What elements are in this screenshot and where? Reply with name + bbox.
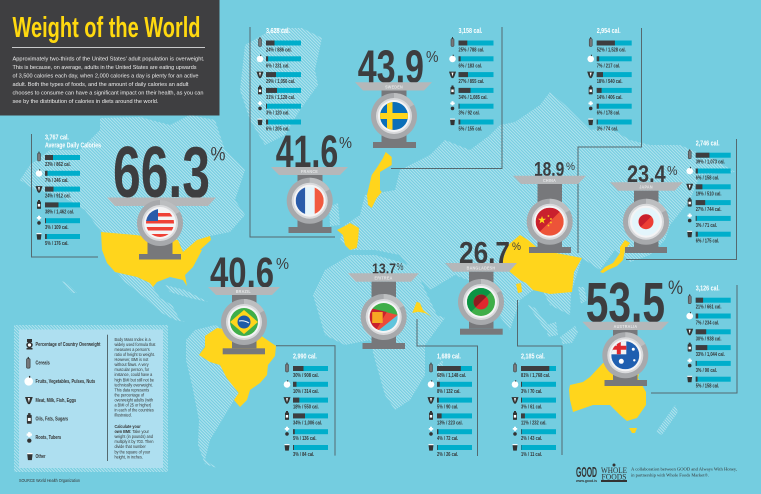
scale: australia: AUSTRALIA xyxy=(614,324,637,329)
panel: sweden calories: 5% / 155 cal. xyxy=(458,126,482,132)
bmi explanation: a BMI of 25 or higher) xyxy=(114,402,152,408)
scale: australia xyxy=(582,271,683,386)
percentage: 41.6 xyxy=(276,126,338,177)
legend: roots: Roots, Tubers xyxy=(36,435,61,441)
flag: china xyxy=(536,208,564,236)
bmi explanation: However, BMI is not xyxy=(114,357,149,362)
total: 2,990 cal. xyxy=(293,353,317,361)
legend: other xyxy=(27,453,46,460)
scale: sweden: % xyxy=(426,49,438,66)
panel: japan calories: 6% / 158 cal. xyxy=(696,175,719,181)
panel: usa calories: 24% / 912 cal. xyxy=(45,193,71,199)
panel: bangladesh calories: 1% / 11 cal. xyxy=(521,452,542,457)
total: 3,126 cal. xyxy=(696,285,720,293)
scale: bangladesh: BANGLADESH xyxy=(467,265,495,271)
panel: eritrea calories: 13% / 223 cal. xyxy=(437,420,463,426)
total: 2,185 cal. xyxy=(521,353,545,361)
panel: eritrea calories xyxy=(428,353,472,457)
scale: usa xyxy=(107,146,225,260)
panel: japan calories: 3% / 71 cal. xyxy=(696,222,717,228)
logo: whole foods xyxy=(601,464,627,482)
title: Weight of the World xyxy=(12,12,200,44)
total: 3,767 cal. xyxy=(45,134,69,142)
panel: china calories: 7% / 217 cal. xyxy=(597,63,620,68)
panel: brazil calories: 30% / 908 cal. xyxy=(293,373,319,378)
logo: good: www.good.is xyxy=(575,479,597,483)
legend: percentage overweight xyxy=(26,339,101,350)
scale: eritrea: % xyxy=(396,262,404,273)
map: sweden xyxy=(367,152,392,208)
intro paragraph: Approximately two-thirds of the United States' adult population is overweight. xyxy=(12,56,205,62)
legend: roots xyxy=(27,432,61,443)
bmi explanation: instance, could have a xyxy=(114,372,153,377)
panel: eritrea calories: 8% / 132 cal. xyxy=(437,388,461,394)
bmi explanation: muscular person, for xyxy=(114,367,150,372)
map: brazil xyxy=(199,328,276,407)
total: 3,158 cal. xyxy=(458,27,483,35)
panel: china calories: 3% / 74 cal. xyxy=(597,126,618,132)
bmi explanation: measures a person's xyxy=(114,347,150,352)
panel: usa calories: 38% / 1,462 cal. xyxy=(45,209,74,215)
scale: brazil xyxy=(208,249,289,354)
intro paragraph: see by the distribution of calories in diets around the world. xyxy=(12,99,159,105)
panel: bangladesh calories: 3% / 70 cal. xyxy=(521,388,542,394)
scale: usa: % xyxy=(210,144,226,166)
percentage: 40.6 xyxy=(210,249,274,297)
panel: usa calories: 3% / 109 cal. xyxy=(45,225,69,230)
scale: china: CHINA xyxy=(543,178,556,183)
panel: bangladesh calories: 3% / 61 cal. xyxy=(521,404,542,410)
intro paragraph: chooses to consume can have a significant impact on their health, as you can xyxy=(12,90,204,96)
bmi explanation: the percentage of xyxy=(114,392,145,397)
total: 1,689 cal. xyxy=(437,353,461,361)
bmi explanation: without flaws. A very xyxy=(114,362,149,367)
panel: usa calories xyxy=(36,134,101,246)
legend: oils: Oils, Fats, Sugars xyxy=(36,417,68,423)
scale: sweden: SWEDEN xyxy=(385,84,403,90)
panel: japan calories xyxy=(686,140,731,244)
collaboration note: in partnership with Whole Foods Market®. xyxy=(631,472,709,478)
scale: australia: % xyxy=(668,278,683,299)
intro paragraph: This is because, on average, adults in the United States are eating upwards xyxy=(12,65,197,71)
legend: fruits: Fruits, Vegetables, Pulses, Nuts xyxy=(36,379,95,385)
panel: sweden calories: 6% / 183 cal. xyxy=(458,63,482,68)
panel: brazil calories: 18% / 550 cal. xyxy=(293,404,319,410)
scale: japan: % xyxy=(667,163,678,178)
flag: france xyxy=(296,187,324,215)
bmi explanation: illustrated. xyxy=(114,412,132,418)
scale: bangladesh: % xyxy=(512,241,521,253)
legend: percentage overweight: Percentage of Country Overweight xyxy=(36,342,101,348)
panel: france calories xyxy=(256,27,301,132)
yellow countries xyxy=(101,152,646,433)
panel: japan calories: 19% / 510 cal. xyxy=(696,191,721,196)
legend: oils xyxy=(27,413,68,424)
panel: france calories: 29% / 1,056 cal. xyxy=(266,79,295,84)
panel: eritrea calories: 4% / 72 cal. xyxy=(437,436,458,441)
bmi explanation: height, in inches. xyxy=(114,454,143,460)
map: bangladesh xyxy=(516,283,522,293)
panel: australia calories xyxy=(686,285,731,389)
scale: eritrea xyxy=(348,260,419,349)
bmi explanation: technically overweight. xyxy=(114,382,153,387)
intro paragraph: adult. Both the types of foods, and the amount of daily calories an adult xyxy=(12,82,189,88)
bmi explanation: Calculate your xyxy=(114,424,141,429)
panel: japan calories: 39% / 1,073 cal. xyxy=(696,159,725,165)
legend panel xyxy=(14,325,168,472)
flag: australia xyxy=(611,341,639,369)
total: 2,954 cal. xyxy=(597,27,621,35)
panel: bangladesh calories: 11% / 232 cal. xyxy=(521,420,547,426)
scale: usa: USA xyxy=(156,200,164,205)
scale: japan: JAPAN xyxy=(639,184,653,190)
panel: eritrea calories: 5% / 90 cal. xyxy=(437,404,458,410)
map: australia xyxy=(569,363,646,421)
bmi explanation: high BMI but still not be xyxy=(114,377,155,382)
collaboration note: A collaboration between GOOD and Always With Honey, xyxy=(631,466,737,472)
logo: good xyxy=(575,464,597,483)
percentage: 18.9 xyxy=(534,159,564,181)
panel: china calories xyxy=(587,27,632,132)
scale: france: % xyxy=(339,135,352,152)
panel: china calories: 52% / 1,528 cal. xyxy=(597,47,626,53)
flag: bangladesh xyxy=(467,288,495,316)
map: japan xyxy=(600,240,630,273)
bmi explanation xyxy=(114,337,156,460)
flag: usa xyxy=(146,209,174,238)
panel: sweden calories: 25% / 788 cal. xyxy=(458,47,484,53)
percentage: 53.5 xyxy=(586,271,665,335)
flag: sweden xyxy=(380,102,408,130)
panel: usa calories: 7% / 246 cal. xyxy=(45,177,69,183)
panel: australia calories: 7% / 234 cal. xyxy=(696,320,719,326)
total: 3,628 cal. xyxy=(266,27,290,35)
bmi explanation: divide that number xyxy=(114,444,146,449)
panel: brazil calories: 34% / 1,006 cal. xyxy=(293,420,322,426)
legend: fruits xyxy=(24,376,95,386)
logo: whole foods: FOODS xyxy=(602,472,626,482)
legend: cereals xyxy=(26,357,50,368)
scale: eritrea: ERITREA xyxy=(374,275,393,281)
legend: meat: Meat, Milk, Fish, Eggs xyxy=(36,398,76,404)
map: france xyxy=(337,223,359,250)
percentage: 66.3 xyxy=(113,133,210,213)
flag: eritrea xyxy=(370,303,398,331)
bmi explanation: This data represents xyxy=(114,387,149,392)
panel: brazil calories: 3% / 84 cal. xyxy=(293,452,314,457)
scale: brazil: BRAZIL xyxy=(236,289,251,294)
panel: france calories: 3% / 120 cal. xyxy=(266,110,290,116)
bmi explanation: overweight adults (with xyxy=(114,397,153,403)
panel: bangladesh calories: 81% / 1,768 cal. xyxy=(521,373,550,378)
panel: australia calories: 21% / 661 cal. xyxy=(696,304,721,310)
legend: cereals: Cereals xyxy=(36,361,50,367)
panel: bangladesh calories: 2% / 43 cal. xyxy=(521,436,542,441)
legend: other: Other xyxy=(36,454,46,460)
panel: china calories: 6% / 178 cal. xyxy=(597,110,620,116)
panel: france calories: 31% / 1,128 cal. xyxy=(266,94,295,100)
percentage: 26.7 xyxy=(459,235,510,270)
bmi explanation: own BMI: Take your xyxy=(114,429,150,434)
percentage: 43.9 xyxy=(358,40,424,92)
panel: china calories: 18% / 540 cal. xyxy=(597,79,622,84)
scale: sweden xyxy=(355,40,438,148)
panel: eritrea calories: 2% / 26 cal. xyxy=(437,452,458,457)
bmi explanation: ratio of height to weight. xyxy=(114,352,155,357)
flag: japan xyxy=(632,208,660,236)
panel: usa calories: 5% / 176 cal. xyxy=(45,241,69,246)
map: usa xyxy=(101,232,211,287)
panel: sweden calories: 27% / 855 cal. xyxy=(458,79,484,84)
panel: sweden calories xyxy=(449,27,494,132)
panel: japan calories: 27% / 744 cal. xyxy=(696,207,721,212)
logo: whole foods: WHOLE xyxy=(601,466,627,475)
scale: china xyxy=(513,159,586,253)
bmi explanation: widely used formula that xyxy=(114,342,156,347)
scale: japan xyxy=(610,161,683,253)
header panel xyxy=(0,0,220,116)
percentage: 23.4 xyxy=(627,161,666,188)
scale: brazil: % xyxy=(276,256,289,273)
panel: japan calories: 6% / 175 cal. xyxy=(696,238,719,244)
panel: france calories: 6% / 205 cal. xyxy=(266,126,290,132)
panel: australia calories: 33% / 1,044 cal. xyxy=(696,352,725,357)
panel: brazil calories: 5% / 136 cal. xyxy=(293,436,317,441)
panel: bangladesh calories xyxy=(512,353,556,457)
panel: france calories: 6% / 231 cal. xyxy=(266,63,290,68)
collaboration note xyxy=(631,466,737,478)
bmi explanation: in each of the countries xyxy=(114,407,154,413)
text: GOOD xyxy=(576,464,597,481)
bmi explanation: weight (in pounds) and xyxy=(114,434,153,439)
scale: china: % xyxy=(566,161,575,173)
panel: brazil calories xyxy=(284,353,328,457)
panel: usa calories: Average Daily Calories xyxy=(45,142,101,150)
panel: usa calories: 23% / 862 cal. xyxy=(45,162,71,167)
map: eritrea xyxy=(412,302,432,317)
panel: china calories: 14% / 406 cal. xyxy=(597,94,622,100)
scale: france: FRANCE xyxy=(301,169,318,174)
bmi explanation: by the square of your xyxy=(114,449,151,454)
percentage: 13.7 xyxy=(372,260,396,277)
flag: brazil xyxy=(230,308,258,336)
panel: brazil calories: 10% / 314 cal. xyxy=(293,388,319,394)
panel: australia calories: 3% / 90 cal. xyxy=(696,367,717,373)
bmi explanation: multiply it by 703. Then xyxy=(114,439,154,444)
intro paragraph: of 3,500 calories each day, when 2,000 calories a day is plenty for an active xyxy=(12,74,198,80)
panel: sweden calories: 3% / 92 cal. xyxy=(458,110,480,116)
source: SOURCE World Health Organization xyxy=(19,478,81,483)
bmi explanation: Body Mass Index is a xyxy=(114,337,151,342)
scale: france xyxy=(271,126,352,233)
legend: meat xyxy=(25,397,76,404)
intro paragraph xyxy=(12,56,205,105)
scale: bangladesh xyxy=(445,235,521,335)
panel: australia calories: 30% / 938 cal. xyxy=(696,336,721,341)
map: china xyxy=(502,235,582,294)
panel: eritrea calories: 68% / 1,148 cal. xyxy=(437,373,466,378)
total: 2,746 cal. xyxy=(696,140,720,148)
panel: australia calories: 5% / 158 cal. xyxy=(696,383,719,389)
panel: sweden calories: 34% / 1,085 cal. xyxy=(458,94,488,100)
panel: france calories: 24% / 886 cal. xyxy=(266,47,292,53)
map: tasmania xyxy=(629,428,637,433)
